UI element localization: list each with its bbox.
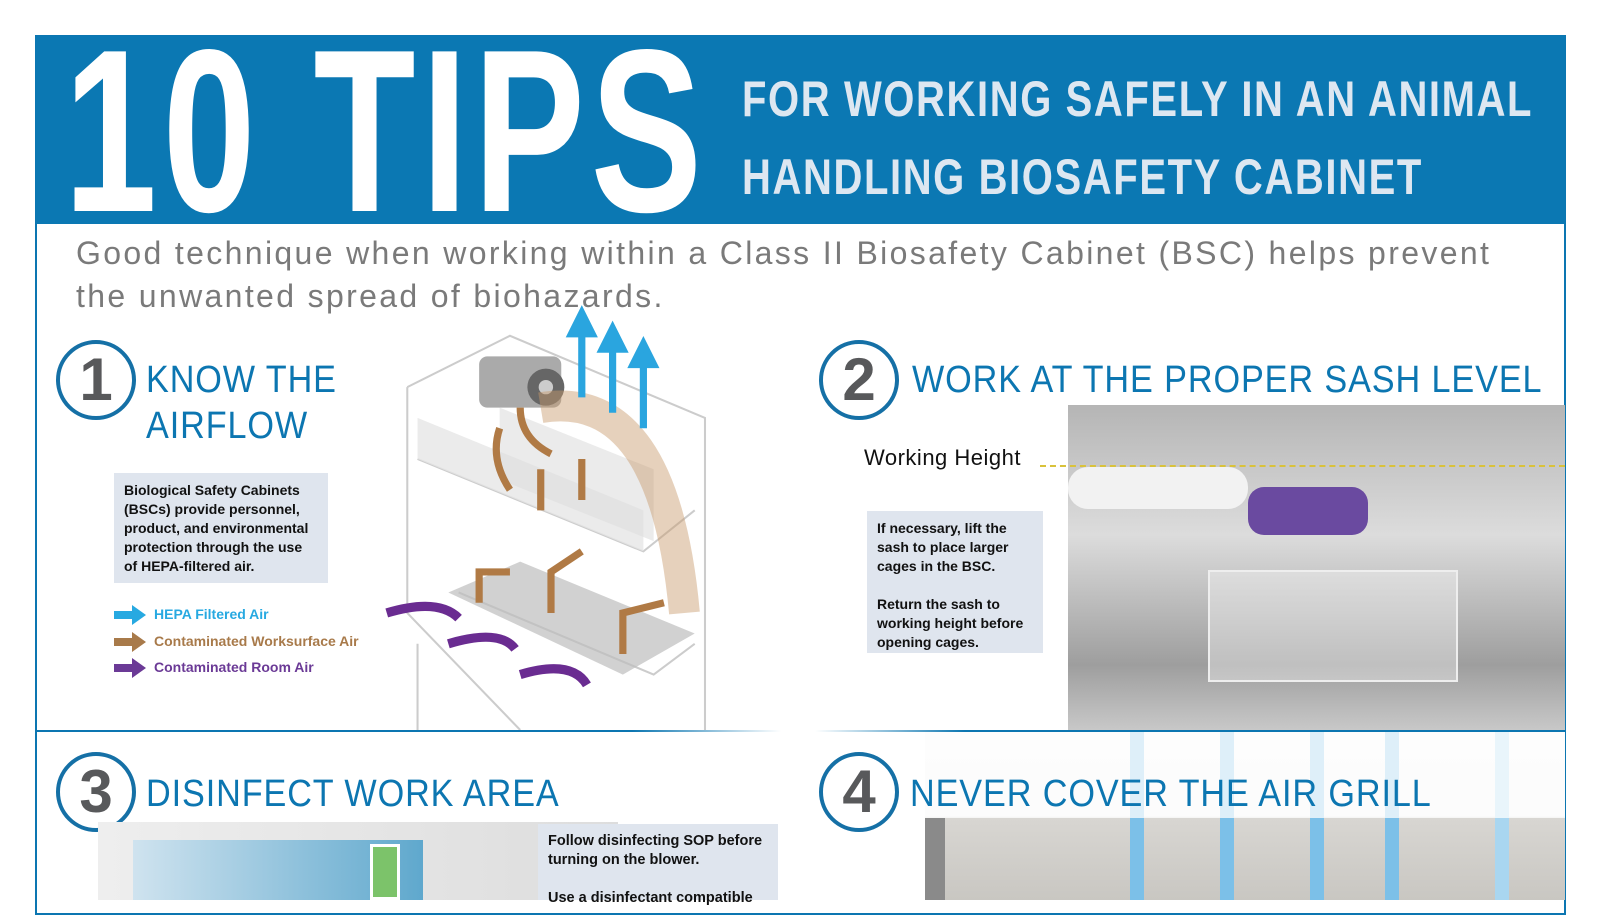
circle 2 [819, 340, 899, 420]
note 3: Follow disinfecting SOP before turning on the blower. [548, 833, 762, 868]
working height label: Working Height [864, 445, 1021, 470]
subtitle: FOR WORKING SAFELY IN AN ANIMAL [742, 71, 1533, 127]
legend [114, 605, 359, 678]
panel 1: know the airflow [56, 305, 706, 730]
note 3: Use a disinfectant compatible [548, 890, 753, 906]
heading 4: NEVER COVER THE AIR GRILL [910, 773, 1432, 815]
sash photo [1068, 405, 1565, 730]
circle 3: 3 [79, 758, 113, 825]
note 1: Biological Safety Cabinets (BSCs) provide personnel, product, and environmental protection through the use of HEPA-filtered air. [124, 482, 308, 574]
circle 1: 1 [79, 346, 113, 413]
intro text [76, 235, 1491, 314]
circle 3 [56, 752, 136, 832]
legend: Contaminated Worksurface Air [154, 633, 359, 649]
grill photo [925, 732, 1565, 900]
heading 1: AIRFLOW [146, 405, 308, 447]
title: 10 TIPS: 10 TIPS [64, 2, 708, 261]
heading 2: WORK AT THE PROPER SASH LEVEL [912, 359, 1542, 401]
heading 1 [146, 359, 337, 447]
legend: HEPA Filtered Air [154, 606, 269, 622]
divider [36, 730, 781, 732]
circle 2: 2 [842, 346, 876, 413]
note 3 [538, 824, 778, 900]
note 2: If necessary, lift the sash to place larger cages in the BSC. [877, 520, 1009, 574]
heading 1: KNOW THE [146, 359, 337, 401]
subtitle: HANDLING BIOSAFETY CABINET [742, 149, 1423, 205]
legend: Contaminated Room Air [154, 659, 314, 675]
panel 4: air grill [819, 732, 1565, 900]
subtitle [742, 71, 1533, 205]
panel 2: sash level [819, 340, 1565, 730]
note 2 [867, 511, 1043, 653]
cabinet airflow illustration [385, 305, 706, 730]
circle 1 [56, 340, 136, 420]
intro text: Good technique when working within a Class II Biosafety Cabinet (BSC) helps prevent [76, 235, 1491, 271]
circle 4 [819, 752, 899, 832]
disinfect photo [98, 822, 618, 900]
intro text: the unwanted spread of biohazards. [76, 278, 665, 314]
note 2: Return the sash to working height before opening cages. [877, 596, 1023, 650]
circle 4: 4 [842, 758, 876, 825]
header banner [36, 36, 1565, 224]
heading 3: DISINFECT WORK AREA [146, 773, 560, 815]
panel 3: disinfect [56, 752, 778, 906]
